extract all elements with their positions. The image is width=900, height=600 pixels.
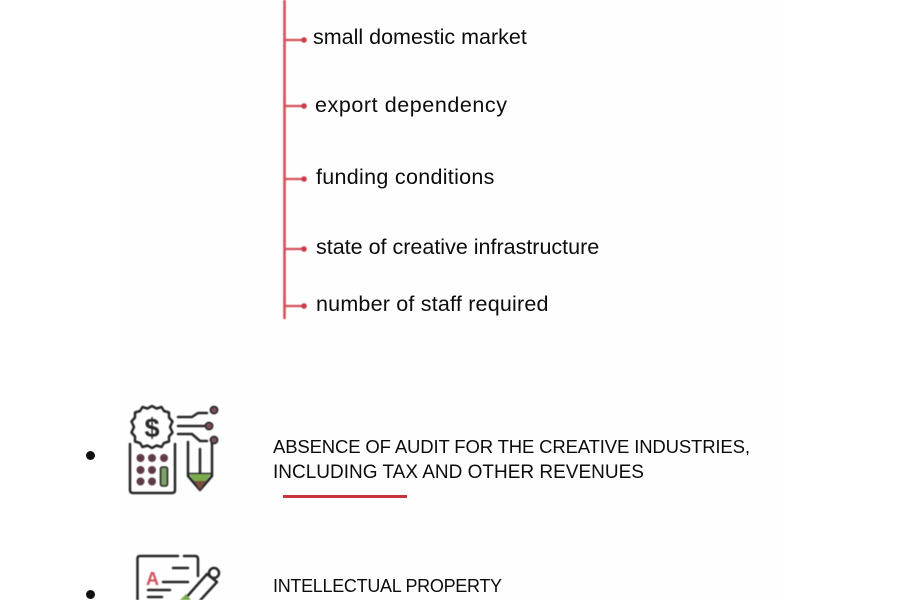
list item: number of staff required: number of staff required bbox=[316, 292, 549, 316]
letter A: A bbox=[146, 569, 159, 589]
bullet: intellectual property bbox=[86, 590, 95, 599]
list item: funding conditions: funding conditions bbox=[316, 165, 495, 189]
faint page panel bbox=[120, 0, 780, 600]
list item: small domestic market: small domestic market bbox=[313, 25, 527, 49]
icon: calculator with dollar gear and pencil bbox=[128, 404, 220, 496]
list item: state of creative infrastructure: state of creative infrastructure bbox=[316, 235, 599, 259]
calculator buttons bbox=[136, 454, 168, 486]
bullet: audit bbox=[86, 451, 95, 460]
dollar sign: $ bbox=[144, 413, 160, 443]
icon: document with pen bbox=[135, 554, 221, 600]
heading: audit: ABSENCE OF AUDIT FOR THE CREATIVE INDUSTRIES, bbox=[273, 436, 750, 457]
red underline bbox=[283, 495, 407, 498]
pen bbox=[184, 568, 219, 600]
heading: intellectual property: INTELLECTUAL PROPERTY bbox=[273, 576, 502, 596]
list item: export dependency: export dependency bbox=[315, 93, 508, 117]
circuit nodes bbox=[205, 406, 218, 444]
heading: audit line two: INCLUDING TAX AND OTHER REVENUES bbox=[273, 462, 644, 483]
